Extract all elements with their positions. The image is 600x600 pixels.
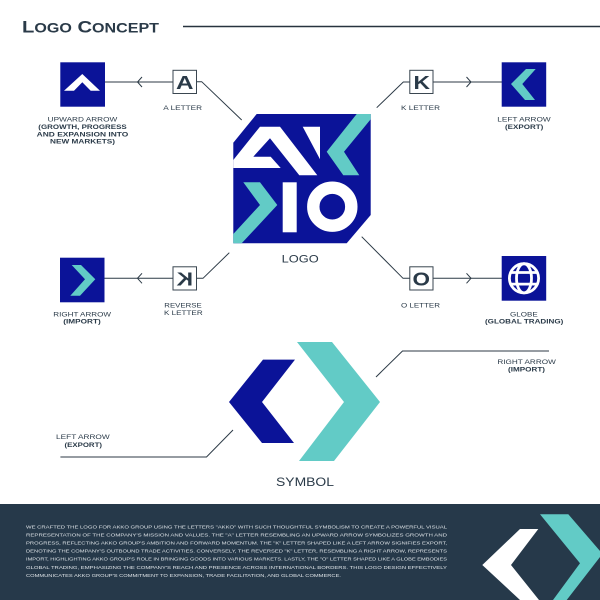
text block: description: REPRESENTATION OF THE COMPANY'S MISSION AND VALUES. THE "A" LETTER RESEMBLING AN UPWARD ARROW SYMBOLIZES GROWTH AND: [26, 532, 448, 538]
panel: reverse K letter to right arrow: REVERSE: [164, 304, 202, 310]
panel: O letter to globe: GLOBE: [510, 312, 538, 318]
text block: description: COMMUNICATES AKKO GROUP'S COMMITMENT TO EXPANSION, TRADE FACILITATION, AND GLOBAL COMMERCE.: [26, 573, 341, 579]
panel: A letter to upward arrow: A: [176, 72, 194, 93]
text block: description: DENOTING THE COMPANY'S OUTBOUND TRADE ACTIVITIES. CONVERSELY, THE REVERSED "K" LETTER, RESEMBLING A RIGHT ARROW, REPRESENTS: [26, 549, 447, 555]
panel: footer: [0, 504, 600, 600]
panel: O letter to globe: O: [412, 268, 430, 289]
text block: description: PROGRESS, REFLECTING AKKO GROUP'S AMBITION AND FORWARD MOMENTUM. THE "K" LETTER SHAPED LIKE A LEFT ARROW SIGNIFIES EXPORT,: [26, 541, 447, 547]
text block: description: [26, 524, 448, 579]
panel: O letter to globe: [362, 237, 563, 325]
panel: A letter to upward arrow: (GROWTH, PROGRESS: [38, 125, 127, 131]
icon: footer symbol: [482, 514, 600, 600]
icon: globe: [509, 264, 539, 293]
symbol label: SYMBOL: [276, 475, 334, 489]
callout: right arrow import: RIGHT ARROW: [497, 360, 556, 366]
panel: main logo: [233, 114, 371, 243]
callout: right arrow import: (IMPORT): [508, 368, 545, 374]
panel: reverse K letter to right arrow: K LETTER: [164, 311, 204, 317]
panel: reverse K letter to right arrow: K: [176, 268, 193, 289]
panel: reverse K letter to right arrow: RIGHT ARROW: [53, 312, 111, 318]
callout: left arrow export: [56, 430, 233, 457]
panel: A letter to upward arrow: AND EXPANSION INTO: [37, 132, 129, 138]
panel: K letter to left arrow: K LETTER: [401, 106, 441, 112]
panel: K letter to left arrow: [377, 62, 551, 131]
callout: left arrow export: (EXPORT): [64, 443, 102, 449]
panel: reverse K letter to right arrow: [53, 253, 229, 325]
text block: description: WE CRAFTED THE LOGO FOR AKKO GROUP USING THE LETTERS "AKKO" WITH SUCH THOUGHTFUL SYMBOLISM TO CREATE A POWERFUL VISUAL: [26, 524, 447, 530]
panel: O letter to globe: (GLOBAL TRADING): [485, 319, 563, 325]
text block: description: GLOBAL TRADING, EMPHASIZING THE COMPANY'S REACH AND PRESENCE ACROSS INTERNATIONAL BORDERS. THIS LOGO DESIGN EFFECTIVELY: [26, 565, 448, 571]
panel: reverse K letter to right arrow: (IMPORT): [63, 319, 101, 325]
panel: A letter to upward arrow: [37, 62, 242, 146]
text block: description: IMPORT, HIGHLIGHTING AKKO GROUP'S ROLE IN BRINGING GOODS INTO VARIOUS MARKETS. LASTLY, THE "O" LETTER SHAPED LIKE A GLOBE EMBODIES: [26, 557, 447, 563]
panel: A letter to upward arrow: UPWARD ARROW: [48, 118, 118, 124]
panel: A letter to upward arrow: A LETTER: [163, 106, 203, 112]
logo label: LOGO: [282, 253, 319, 265]
panel: O letter to globe: O LETTER: [401, 304, 441, 310]
panel: K letter to left arrow: K: [414, 72, 431, 93]
callout: left arrow export: LEFT ARROW: [56, 435, 110, 441]
callout: right arrow import: [376, 351, 556, 377]
panel: K letter to left arrow: (EXPORT): [505, 125, 543, 131]
panel: A letter to upward arrow: NEW MARKETS): [50, 140, 115, 146]
title: LOGO CONCEPT: [22, 18, 160, 36]
panel: K letter to left arrow: LEFT ARROW: [497, 118, 551, 124]
panel: symbol: [229, 342, 380, 461]
